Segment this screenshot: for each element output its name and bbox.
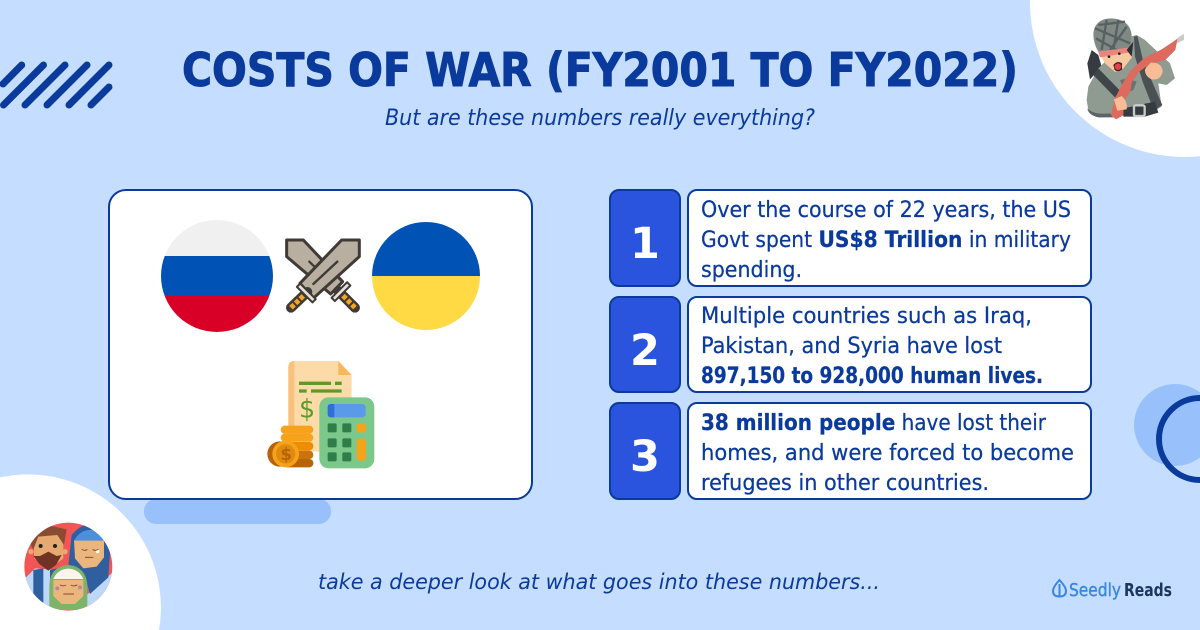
icon: receipt, coins and calculator bbox=[267, 361, 374, 468]
bottom tagline: take a deeper look at what goes into these numbers... bbox=[318, 570, 880, 595]
panel: main image card bbox=[109, 190, 532, 524]
icon: crossed swords bbox=[287, 240, 359, 308]
card bbox=[109, 190, 532, 499]
number box 3 bbox=[610, 403, 680, 499]
panel: point 1 bbox=[610, 190, 1091, 286]
panel: point 2 bbox=[610, 297, 1091, 392]
icon: Russian flag bbox=[160, 220, 274, 333]
text box 1: spending. bbox=[701, 258, 802, 283]
logo drop bbox=[1053, 580, 1066, 596]
text box 1: Over the course of 22 years, the US bbox=[701, 198, 1071, 223]
text box 2: 897,150 to 928,000 human lives. bbox=[701, 364, 1043, 389]
icon: soldier bbox=[1087, 18, 1184, 119]
icon: receipt, coins and calculator: $ bbox=[280, 445, 292, 464]
text box 1 bbox=[688, 190, 1091, 286]
decorative diagonal stripes bbox=[3, 65, 109, 105]
text box 3: 38 million people have lost their bbox=[701, 411, 1047, 436]
decorative corner circle: bottom left bbox=[0, 474, 161, 630]
number box 2: 2 bbox=[630, 326, 660, 376]
text box 2: Multiple countries such as Iraq, bbox=[701, 304, 1032, 329]
logo: Seedly Reads bbox=[1053, 580, 1172, 601]
text box 3 bbox=[688, 403, 1091, 499]
number box 1 bbox=[610, 190, 680, 286]
icon: refugee family bbox=[23, 523, 112, 613]
title: COSTS OF WAR (FY2001 TO FY2022) bbox=[182, 43, 1018, 97]
text box 2 bbox=[688, 297, 1091, 392]
card shadow bar bbox=[144, 499, 331, 524]
text box 1: Govt spent US$8 Trillion in military bbox=[701, 228, 1071, 253]
text box 2: Pakistan, and Syria have lost bbox=[701, 334, 1002, 359]
text box 3: refugees in other countries. bbox=[701, 471, 989, 496]
panel: point 3 bbox=[610, 403, 1091, 499]
icon: Ukrainian flag bbox=[370, 220, 482, 332]
number box 2 bbox=[610, 297, 680, 392]
text box 3: homes, and were forced to become bbox=[701, 441, 1074, 466]
decorative corner circle: top right bbox=[1030, 0, 1200, 157]
icon: receipt, coins and calculator: $ bbox=[299, 394, 315, 424]
logo: Seedly Reads: Seedly bbox=[1069, 581, 1121, 601]
subtitle: But are these numbers really everything? bbox=[385, 106, 815, 131]
number box 3: 3 bbox=[630, 432, 660, 482]
decorative circles: right edge bbox=[1134, 384, 1200, 480]
logo: Seedly Reads: Reads bbox=[1124, 581, 1172, 601]
number box 1: 1 bbox=[630, 219, 660, 269]
